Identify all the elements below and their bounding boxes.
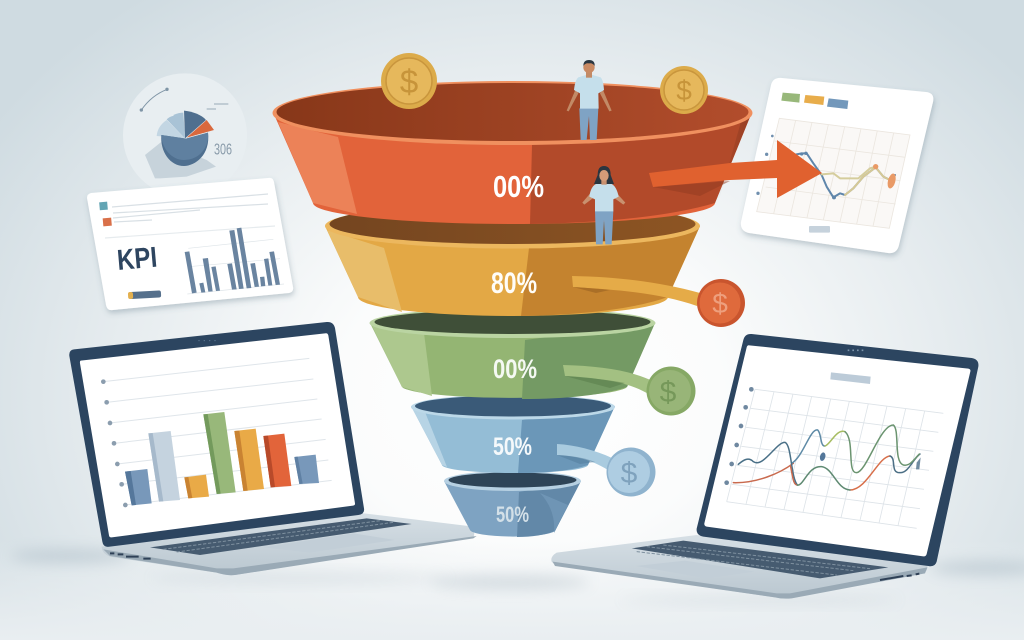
- axis dots: [756, 135, 830, 233]
- KPI progress bar: [128, 290, 161, 299]
- tier 4 exit pipe and coin: [557, 444, 656, 496]
- person: man on rim: [567, 60, 612, 140]
- webcam: [848, 348, 865, 353]
- webcam: [198, 339, 217, 342]
- KPI label: KPI: [116, 242, 158, 277]
- axis dots: [724, 387, 754, 485]
- panel: pie chart badge: 306: [214, 142, 232, 159]
- panel: pie chart badge: [123, 73, 247, 197]
- tier 3 exit pipe and coin: [563, 365, 696, 416]
- coin: top right: $: [676, 75, 692, 106]
- bar chart gridlines: [103, 358, 332, 505]
- tablet lines: [793, 152, 897, 199]
- chart lines: [733, 425, 921, 490]
- label: 00%: [493, 354, 537, 384]
- legend squares: [99, 202, 112, 226]
- funnel tier 2: 80%: [325, 204, 700, 316]
- coin: top left: [381, 53, 437, 109]
- person: woman on rim: [582, 166, 625, 244]
- tier 4 exit pipe and coin: $: [621, 457, 638, 490]
- label: 50%: [493, 433, 532, 461]
- line chart grid: [727, 389, 943, 528]
- panel: KPI card: [87, 178, 293, 310]
- label: 80%: [491, 267, 537, 300]
- keyboard: [632, 541, 888, 578]
- ports: [880, 574, 919, 580]
- keyboard: [150, 518, 412, 555]
- trackpad: [636, 561, 755, 578]
- screen: [704, 345, 970, 556]
- panel: trend tablet: [741, 78, 933, 253]
- funnel tier 1: 00%: [272, 81, 752, 224]
- header text lines: [105, 194, 275, 238]
- panel: right laptop: [551, 334, 978, 599]
- coin: top left: $: [400, 63, 418, 100]
- bars: [125, 412, 319, 505]
- laptop base: [102, 513, 474, 575]
- tablet line chart grid: [757, 118, 910, 228]
- label: 50%: [496, 502, 529, 527]
- tier 2 exit pipe and coin: [572, 276, 745, 327]
- trackpad: [263, 533, 395, 553]
- tier 3 exit pipe and coin: $: [660, 376, 677, 409]
- screen bezel: [697, 334, 978, 566]
- KPI bar chart: [185, 228, 284, 294]
- funnel tier 4: 50%: [411, 394, 615, 473]
- panel: left laptop: [69, 322, 477, 575]
- title bar: [830, 372, 871, 384]
- screen: [80, 333, 355, 537]
- ports: [110, 553, 151, 559]
- screen bezel: [69, 322, 364, 547]
- label: 00%: [493, 169, 544, 204]
- coin: top right: [660, 66, 708, 114]
- funnel tier 3: 00%: [370, 308, 656, 399]
- laptop base: [551, 535, 927, 598]
- legend chips: [781, 93, 848, 109]
- axis dots: [101, 379, 128, 507]
- tier 1 exit arrow: [649, 140, 822, 198]
- floor shadows: [0, 540, 1024, 640]
- tier 2 exit pipe and coin: $: [712, 288, 728, 319]
- funnel tier 5: 50%: [444, 471, 581, 537]
